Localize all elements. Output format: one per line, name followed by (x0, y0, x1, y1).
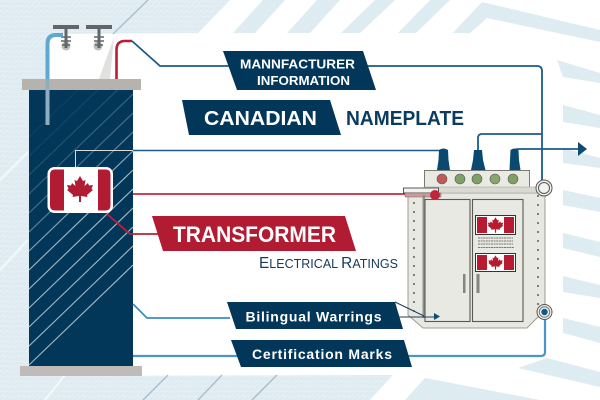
indicator lights (437, 174, 518, 184)
rivets (413, 195, 539, 312)
heading: canadian nameplate: CANADIAN (204, 108, 317, 130)
insulator left (53, 25, 79, 50)
red terminal clamp (404, 188, 441, 200)
maple leaf (67, 176, 93, 202)
flag connector line (76, 150, 444, 167)
label: manufacturer information: MANNFACTURER (240, 58, 355, 72)
connector one (437, 148, 450, 170)
certification connector lines (133, 320, 545, 356)
connector three (510, 148, 520, 170)
connector two (471, 150, 486, 170)
door warning text lines (478, 238, 514, 248)
label: transformer (152, 216, 356, 251)
top right ring (536, 180, 552, 196)
pole base (20, 366, 142, 376)
subheading: electrical ratings: ELECTRICAL RATINGS (259, 255, 398, 272)
canadian flag badge (48, 167, 113, 213)
transformer pole (20, 79, 142, 376)
side strip (422, 195, 425, 318)
red wire (116, 41, 132, 79)
transformer cabinet (404, 170, 552, 328)
arrow head (578, 142, 587, 156)
label: transformer: TRANSFORMER (173, 222, 336, 247)
pole body (29, 90, 133, 366)
top connectors (437, 148, 520, 170)
top control box (424, 170, 530, 188)
lower door flag (476, 254, 516, 272)
heading: canadian nameplate: NAMEPLATE (346, 108, 464, 130)
label: certification marks: Certification Marks (252, 346, 392, 362)
insulator right (86, 25, 112, 50)
top connector lines and arrow (478, 134, 587, 160)
blue wire from insulator (48, 35, 63, 125)
heading: canadian nameplate (182, 100, 464, 135)
bilingual connector line (133, 304, 230, 318)
label: bilingual warnings: Bilingual Warrings (246, 308, 382, 324)
label: bilingual warnings (227, 302, 403, 329)
grey wedge (99, 37, 114, 79)
label: manufacturer information (223, 51, 376, 90)
insulators (53, 25, 112, 50)
door handles (463, 274, 480, 293)
label: manufacturer information: INFORMATION (257, 74, 350, 88)
red connector line (133, 193, 432, 195)
pole diagonal hatching (29, 90, 133, 366)
left door (425, 200, 470, 322)
pole top cap (22, 79, 141, 90)
cabinet body (408, 193, 545, 328)
bottom right ring (537, 304, 552, 320)
manufacturer connector line (132, 41, 542, 182)
right door (472, 200, 523, 322)
top rail (424, 187, 546, 193)
upper door flag (476, 216, 516, 234)
label: certification marks (231, 340, 412, 367)
red line to transformer label (107, 214, 158, 234)
arrow from bilingual label to cabinet (395, 302, 440, 320)
